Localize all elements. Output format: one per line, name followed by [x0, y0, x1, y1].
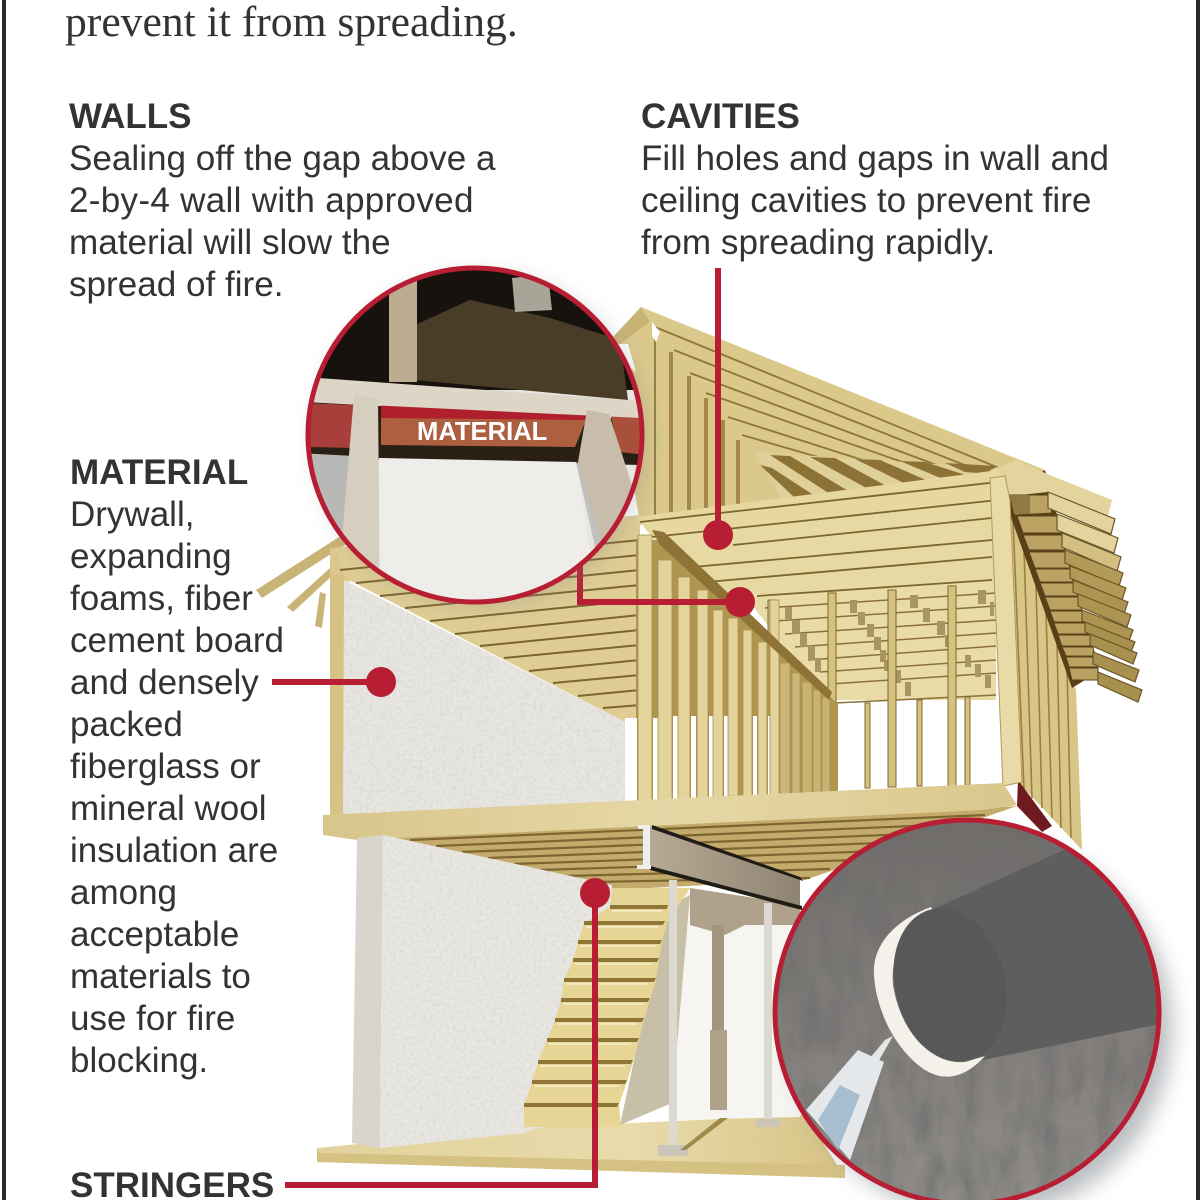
- text block: material: fiberglass or: [70, 747, 261, 786]
- text block: cavities: CAVITIES: [641, 97, 800, 136]
- left ceiling joists: [335, 515, 640, 722]
- frame: right border: [1196, 0, 1200, 1200]
- text block: material: Drywall,: [70, 495, 194, 534]
- text block: walls: 2-by-4 wall with approved: [69, 181, 474, 220]
- upper left drywall wall: [330, 575, 625, 815]
- inset photo: wall top fire block: [300, 260, 650, 610]
- text block: cavities: Fill holes and gaps in wall and: [641, 139, 1109, 178]
- text block: material: insulation are: [70, 831, 278, 870]
- ceiling joists and front beam: [636, 470, 1000, 596]
- floor joists underside: [383, 806, 1017, 890]
- text block: cavities: from spreading rapidly.: [641, 223, 995, 262]
- callout: cavities leader: [703, 268, 733, 550]
- text block: material: cement board: [70, 621, 284, 660]
- text block: material: MATERIAL: [70, 453, 248, 492]
- text block: material: use for fire: [70, 999, 235, 1038]
- lower rear wall and column shadow: [620, 888, 800, 1125]
- text block: walls: spread of fire.: [69, 265, 283, 304]
- back wall with windows: [745, 578, 1000, 790]
- text block: material: among: [70, 873, 177, 912]
- callout: walls leader: [577, 560, 755, 617]
- text block: walls: material will slow the: [69, 223, 391, 262]
- lower floor slab: [317, 1115, 845, 1178]
- text block: material: mineral wool: [70, 789, 266, 828]
- right eave rafters: [990, 460, 1142, 702]
- near wall studs: [625, 476, 1022, 808]
- floor deck: [323, 783, 1017, 840]
- inset label: MATERIAL: [417, 418, 547, 446]
- left eave rafters: [256, 530, 356, 628]
- inset photo: sealed pipe penetration: [770, 815, 1172, 1200]
- text block: walls: [69, 97, 496, 304]
- text block: material: [70, 453, 284, 1080]
- text block: material: materials to: [70, 957, 251, 996]
- roof gable framing: [612, 307, 1045, 525]
- text block: walls: WALLS: [69, 97, 191, 136]
- stairs: [524, 888, 690, 1127]
- text block: material: and densely: [70, 663, 259, 702]
- right side wall studs: [1005, 497, 1082, 850]
- text block: material: packed: [70, 705, 183, 744]
- house illustration with callouts: [256, 266, 1184, 1200]
- callout: stringers leader: [285, 878, 610, 1188]
- text block: walls: Sealing off the gap above a: [69, 139, 496, 178]
- text block: material: blocking.: [70, 1041, 208, 1080]
- text block: material: acceptable: [70, 915, 239, 954]
- text block: material: expanding: [70, 537, 232, 576]
- callout leader lines and dots: [272, 268, 755, 1188]
- steel I-beam and posts: [637, 825, 803, 1156]
- text block: cavities: ceiling cavities to prevent fire: [641, 181, 1091, 220]
- text block: material: foams, fiber: [70, 579, 253, 618]
- frame: left border: [2, 0, 6, 1200]
- callout: material leader: [272, 667, 396, 697]
- text block: cavities: [641, 97, 1109, 262]
- lower left drywall wall: [352, 835, 612, 1148]
